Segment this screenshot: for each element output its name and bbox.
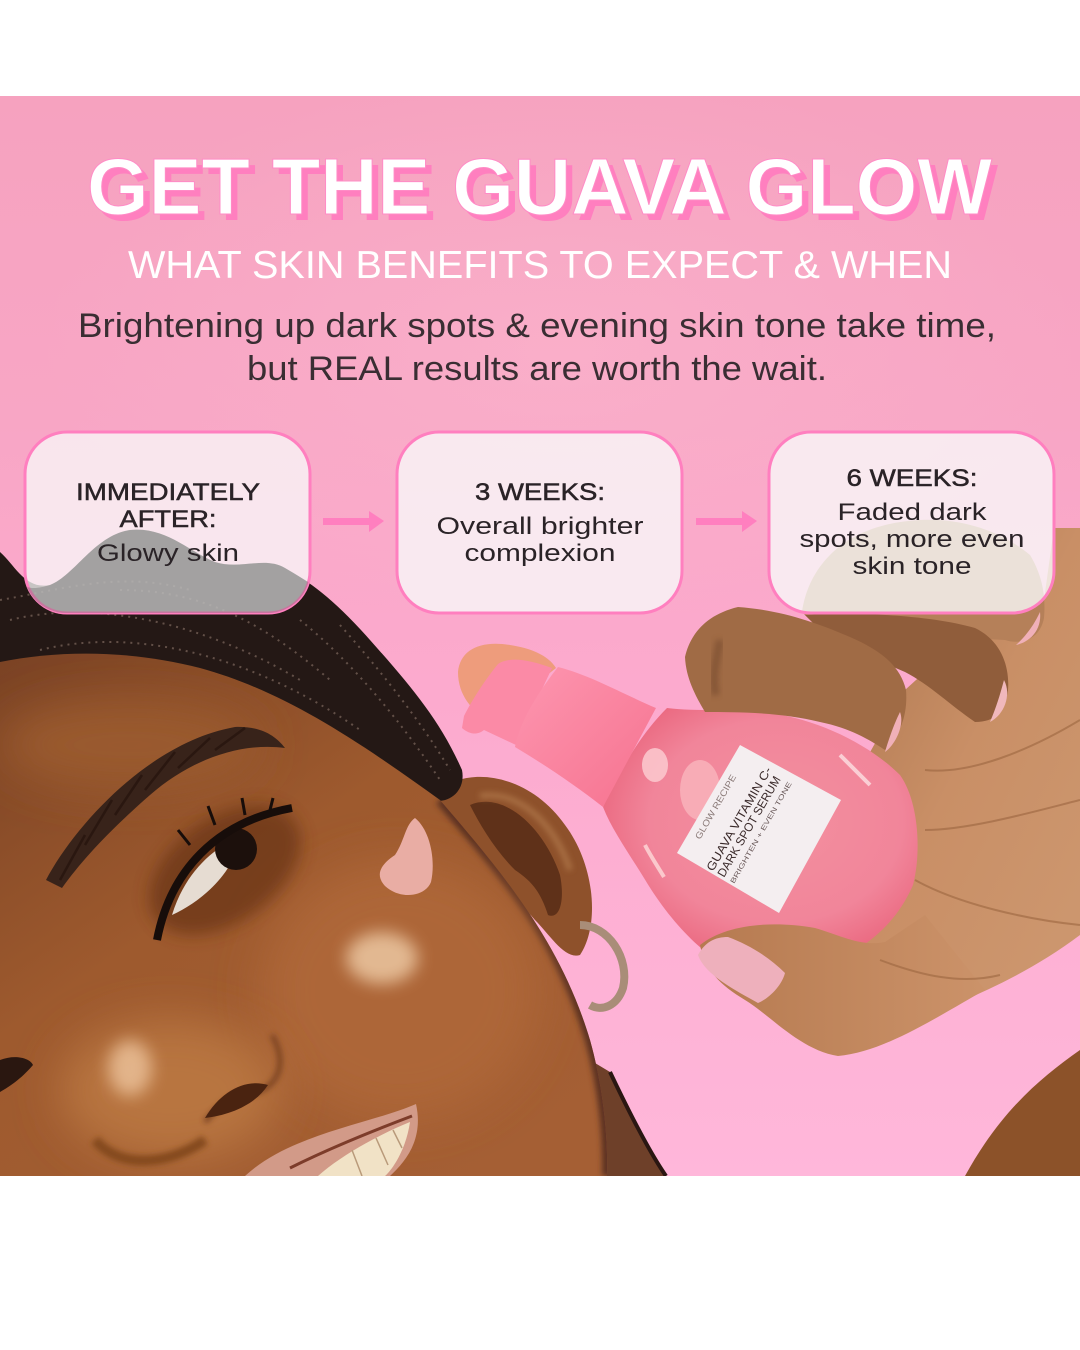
intro text: but REAL results are worth the wait. [247,350,827,388]
eye socket shadow [144,800,306,941]
photo: cheek highlights [108,932,418,1096]
panel heading: IMMEDIATELY [76,479,260,506]
panel body: Glowy skin [97,540,239,567]
arrow 2 [696,511,757,532]
nose warm tone [60,1020,280,1160]
title: GET THE GUAVA GLOW [87,142,992,231]
forehead warm tone [2,695,218,784]
arrow 1 [323,511,384,532]
intro text: Brightening up dark spots & evening skin tone take time, [78,307,996,345]
photo: nose and nostril [95,1035,280,1161]
thumb crease [880,960,1000,979]
thumb nail [698,937,785,1003]
collar [515,667,656,807]
panel body [436,513,644,567]
subtitle: WHAT SKIN BENEFITS TO EXPECT & WHEN [128,244,952,287]
product label: GUAVA VITAMIN C- [703,764,775,874]
panel: 3 weeks [397,432,682,613]
hair seen through panel [24,530,310,613]
intro text [81,312,993,380]
title: GET THE GUAVA GLOW [93,148,998,237]
photo: serum bottle [462,660,918,960]
photo: hair [0,530,463,801]
palm creases [915,720,1080,925]
photo: woman's shoulder [965,1050,1080,1176]
panel heading: 3 WEEKS: [475,479,605,506]
bottle body [603,708,918,960]
cheek warm tone [260,860,540,1120]
panel: immediately after [24,432,310,613]
panel body: spots, more even [800,526,1024,553]
photo: cream dab [380,818,433,895]
product label: BRIGHTEN + EVEN TONE [730,781,794,885]
fingertip behind pump [458,644,556,705]
photo: hand palm [458,528,1080,1002]
photo: face [0,654,607,1176]
photo: ear [440,777,592,956]
product label [677,745,841,913]
folded finger behind card [802,520,1044,642]
photo: lips and teeth [245,1104,418,1176]
front finger [685,607,906,750]
photo: eyebrow [46,727,285,888]
product label: DARK SPOT SERUM [714,774,784,880]
panel heading: AFTER: [120,506,216,533]
photo: hand fingers and thumb [685,520,1044,1056]
finger nail slivers [885,712,901,752]
panel body: Faded dark [838,499,988,526]
pump head [462,660,552,745]
panel body: skin tone [852,553,972,580]
photo: eye [157,798,292,940]
jaw shading [440,800,607,1176]
thumb [700,915,985,1056]
panel body [800,499,1024,580]
middle finger [805,614,1008,722]
palm [866,528,1080,995]
photo: hoop earring [580,925,624,1008]
photo: woman's neck [590,1060,666,1176]
panel heading [76,479,260,533]
bottle gloss [642,748,668,782]
product label: GLOW RECIPE [693,773,738,841]
panel body: Overall brighter [436,513,644,540]
panel heading: 6 WEEKS: [846,465,978,492]
photo: other eye [0,1057,33,1092]
panel body: complexion [464,540,616,567]
panel: 6 weeks [769,432,1054,613]
